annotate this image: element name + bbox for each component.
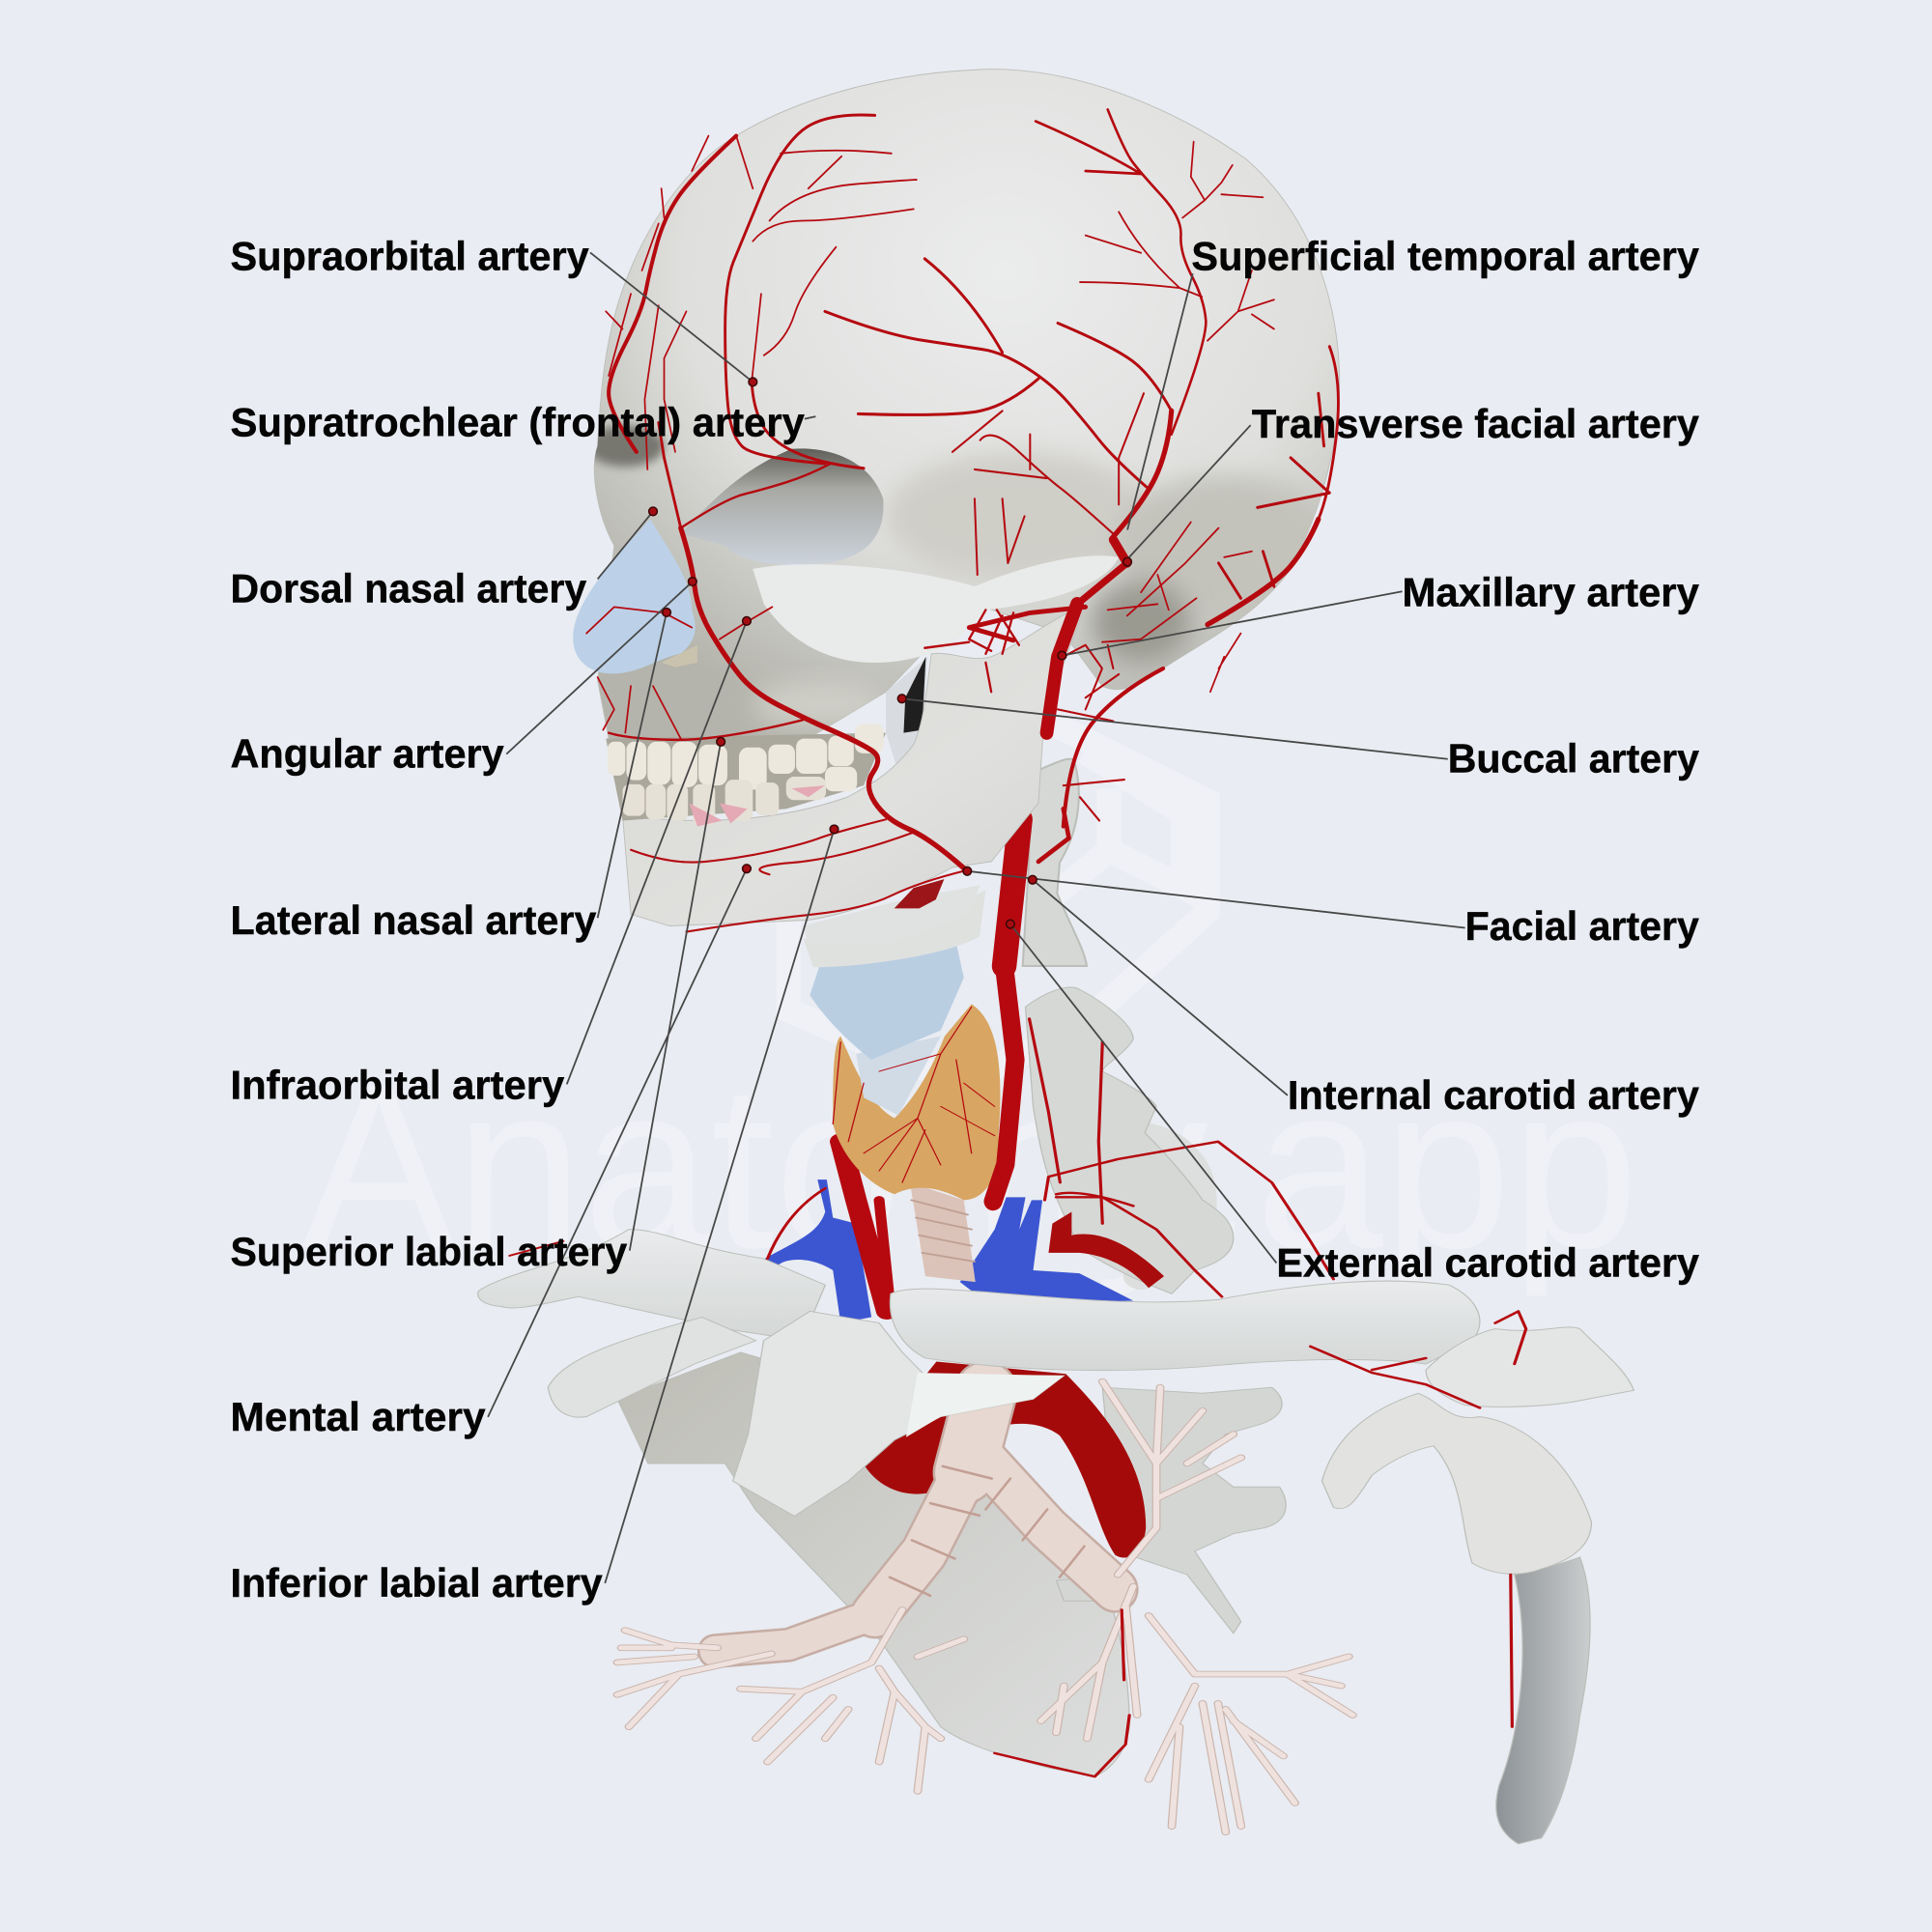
- watermark: wordmark: Anatomy.app: [301, 1037, 1638, 1297]
- left common carotid: [840, 1142, 891, 1311]
- skull: [573, 70, 1340, 944]
- superficial temporal artery: [825, 109, 1274, 575]
- right clavicle: [890, 1281, 1480, 1371]
- label: supratrochlear artery: Supratrochlear (frontal) artery: [231, 400, 805, 445]
- neck vertebrae: [1026, 987, 1234, 1293]
- label: maxillary artery: Maxillary artery: [1403, 570, 1700, 615]
- label: angular artery: Angular artery: [231, 731, 504, 777]
- skull shading: [586, 426, 1335, 727]
- zygomatic bone and arch: [753, 555, 1119, 663]
- scapula: [1321, 1393, 1591, 1574]
- vertebrae lower: [1056, 1387, 1286, 1634]
- upper teeth: [608, 724, 884, 791]
- thyroid arteries: [833, 1007, 995, 1182]
- dark inner jaw: [903, 657, 925, 733]
- watermark: logo: [788, 690, 1208, 1084]
- label: facial artery: Facial artery: [1465, 903, 1700, 949]
- label: mental artery: Mental artery: [231, 1394, 486, 1439]
- label: supraorbital artery: Supraorbital artery: [231, 233, 589, 278]
- front skeleton and neck organs: [478, 943, 1634, 1844]
- label: buccal artery: Buccal artery: [1448, 736, 1700, 781]
- tongue tissue: [895, 879, 944, 908]
- veins left: [760, 1179, 871, 1323]
- label: external carotid artery: External carotid artery: [1276, 1239, 1700, 1285]
- cranium: [594, 70, 1340, 739]
- label: inferior labial artery: Inferior labial artery: [231, 1560, 603, 1605]
- hyoid and upper larynx: [804, 890, 985, 967]
- label: transverse facial artery: Transverse facial artery: [1252, 401, 1700, 446]
- external carotid and maxillary artery: [924, 563, 1163, 862]
- teeth backing: [606, 733, 886, 820]
- acromion: [1426, 1327, 1634, 1406]
- label: internal carotid artery: Internal carotid artery: [1288, 1072, 1700, 1118]
- upper trachea: [910, 1182, 976, 1282]
- veins right: [960, 1197, 1133, 1302]
- hyoid: [803, 885, 980, 944]
- orbit: [681, 448, 884, 565]
- gum: [689, 785, 825, 827]
- nostril: [662, 645, 697, 668]
- right labels: [1191, 233, 1700, 1285]
- upper neck vertebrae: [1023, 759, 1087, 966]
- tracheal rings: [912, 1200, 975, 1262]
- bronchial trees: [617, 1381, 1352, 1833]
- mandible: [622, 604, 1086, 926]
- back skeleton and great vessels: [617, 987, 1286, 1776]
- gap behind maxilla: [886, 657, 927, 768]
- subclavian artery: [1048, 1211, 1164, 1288]
- thyroid gland: [833, 1004, 1000, 1200]
- label: dorsal nasal artery: Dorsal nasal artery: [231, 566, 587, 611]
- humerus shaped bone: [1496, 1557, 1590, 1844]
- first rib right: [1064, 1134, 1199, 1276]
- trachea and main bronchi: [715, 1392, 1115, 1651]
- facial and labial arteries: [586, 115, 966, 932]
- larynx cartilage: [810, 943, 964, 1060]
- lower teeth: [622, 777, 826, 825]
- infographic: arteries of head and neck: [231, 69, 1699, 1845]
- rib stub left: [548, 1318, 756, 1417]
- right common and internal carotid: [993, 819, 1020, 1202]
- label: superior labial artery: Superior labial artery: [231, 1229, 628, 1274]
- left labels: [231, 233, 805, 1605]
- label: infraorbital artery: Infraorbital artery: [231, 1063, 565, 1108]
- posterior scalp arteries: [1102, 347, 1338, 692]
- leader lines and dots: [488, 252, 1465, 1583]
- sternal bright cartilage: [906, 1373, 1064, 1437]
- label: lateral nasal artery: Lateral nasal artery: [231, 897, 597, 943]
- larynx cricoid: [856, 1037, 941, 1115]
- sternum: [733, 1311, 1064, 1517]
- aortic arch: [865, 1361, 1146, 1557]
- rib cage bone behind: [617, 1352, 1129, 1776]
- clavicle left: [478, 1230, 825, 1341]
- label: superficial temporal artery: Superficial temporal artery: [1191, 233, 1700, 278]
- small arteries lower neck and shoulder: [509, 1019, 1526, 1776]
- nasal cartilage: [573, 519, 696, 673]
